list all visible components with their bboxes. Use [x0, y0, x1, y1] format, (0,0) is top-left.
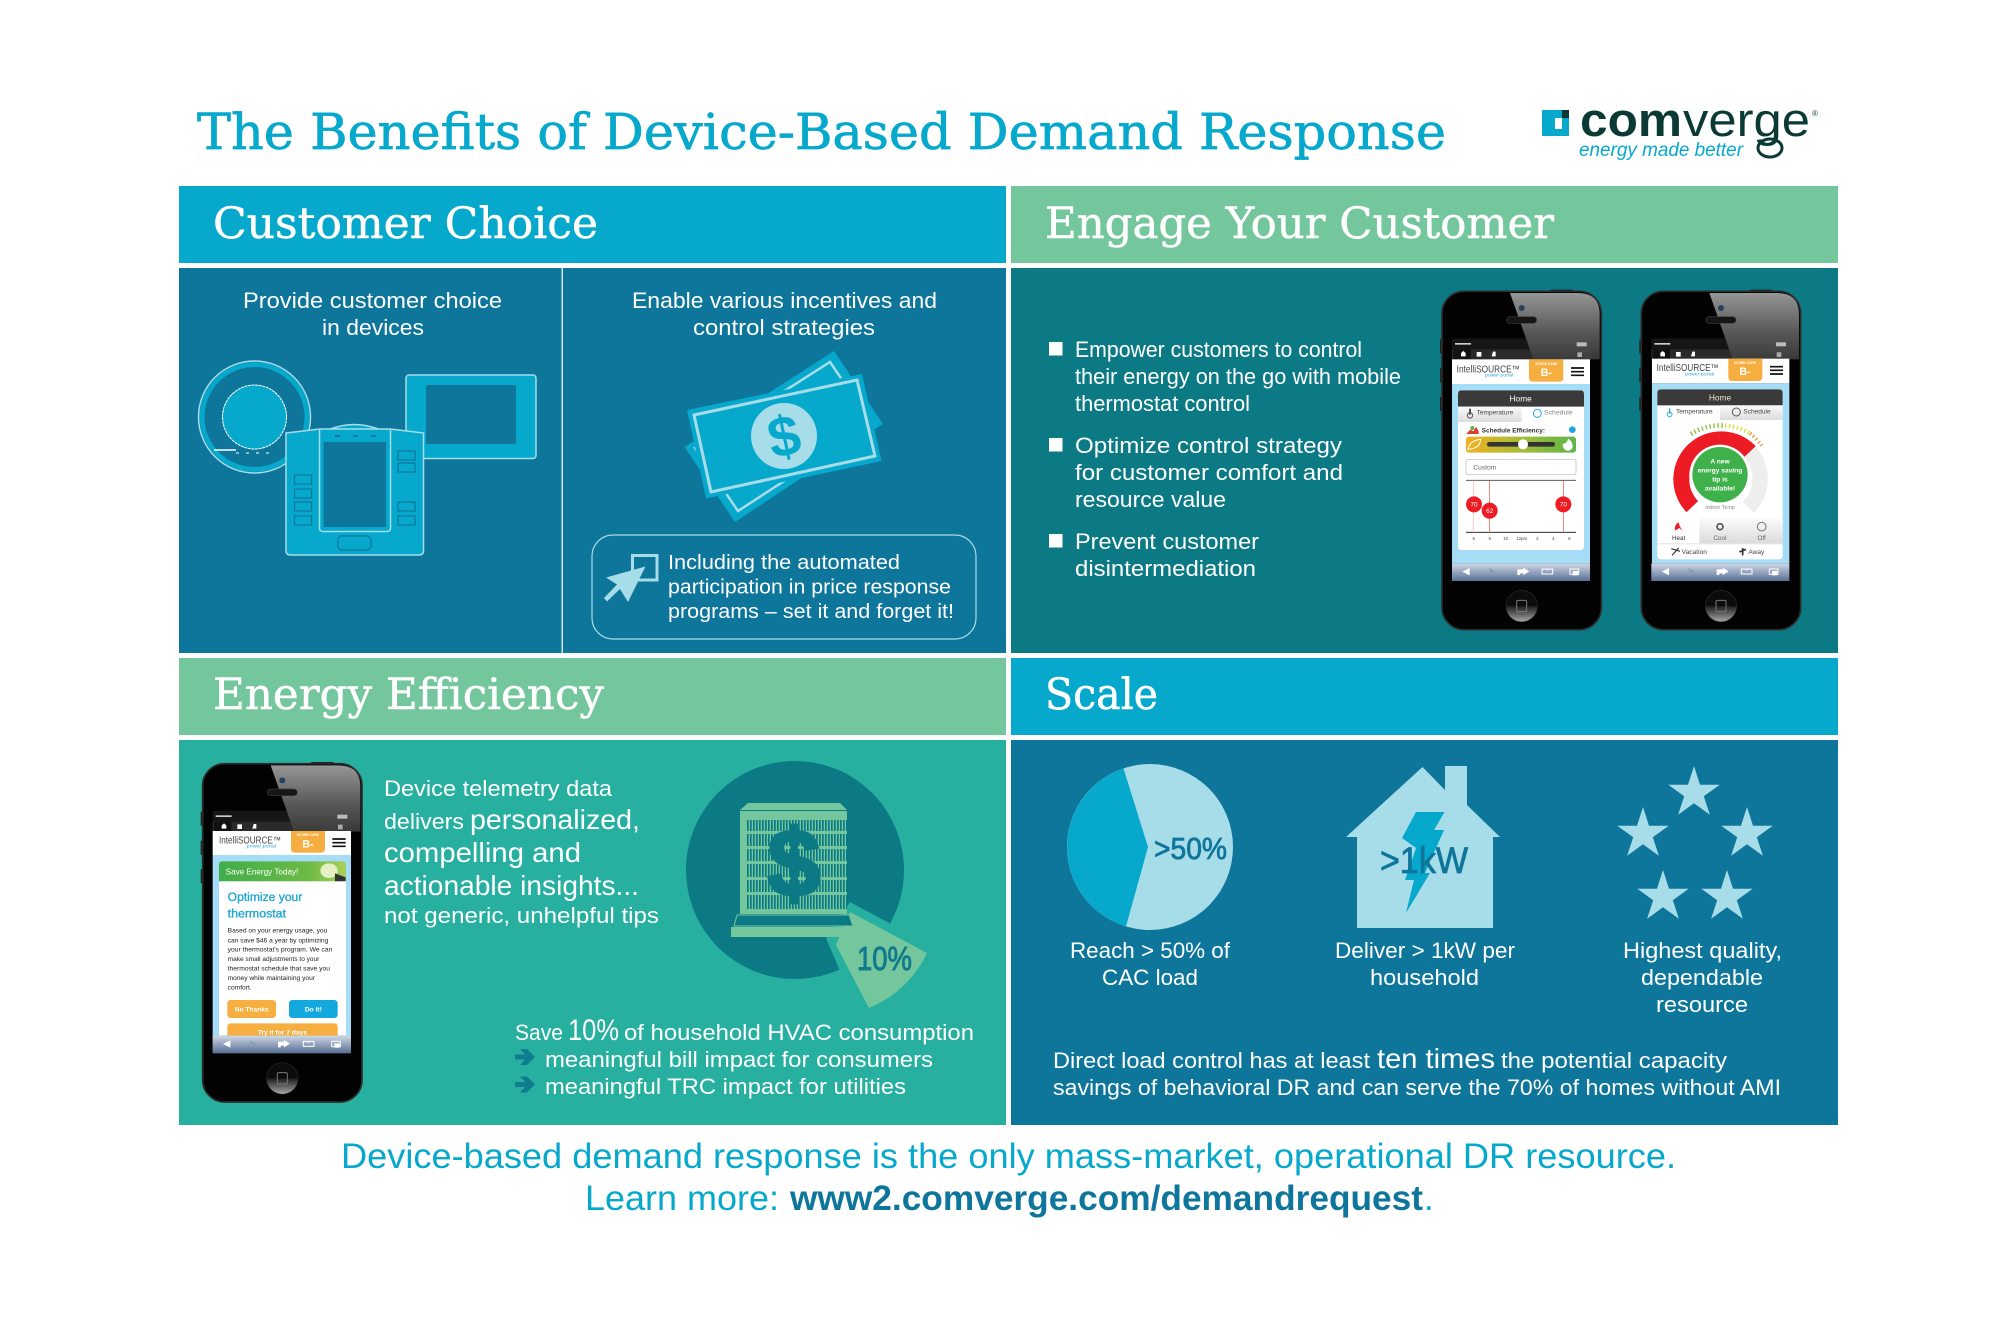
chart: pie >50%	[1067, 764, 1233, 930]
text: save 10% of HVAC consumption: 10%	[568, 1014, 619, 1047]
text: quality: Highest quality,	[1623, 938, 1782, 963]
phone: tip screen: IntelliSOURCE™	[219, 835, 281, 846]
icon: dollar bills: $	[762, 402, 806, 472]
panel: Customer Choice	[179, 186, 1006, 653]
phone: tip screen: make small adjustments to your	[228, 956, 319, 963]
text: customer choice in devices	[243, 288, 502, 340]
panel body	[179, 740, 1006, 1125]
phone: schedule efficiency screen: 6	[1568, 536, 1571, 541]
text: customer choice in devices: Provide customer choice	[243, 288, 502, 313]
arrow 1	[515, 1049, 535, 1065]
icon: round thermostat	[198, 361, 310, 473]
heading: Scale: Scale	[1045, 670, 1158, 720]
text: direct load control	[1053, 1043, 1781, 1100]
heading: Energy Efficiency: Energy Efficiency	[213, 670, 605, 720]
bullet 3	[1049, 529, 1259, 581]
phone: thermostat gauge screen	[1639, 290, 1801, 630]
phone: thermostat gauge screen: Vacation	[1682, 549, 1707, 556]
text: direct load control: the potential capacity	[1501, 1048, 1727, 1073]
footer call to action: .	[1424, 1179, 1434, 1218]
text: direct load control: savings of behavioral DR and can serve the 70% of homes without AMI	[1053, 1075, 1781, 1100]
logo wordmark: com	[1580, 93, 1682, 146]
text: telemetry insights: delivers	[384, 809, 464, 834]
header band: Energy Efficiency	[179, 658, 1006, 735]
text: telemetry insights: compelling and	[384, 837, 581, 868]
phone: schedule efficiency screen: 70	[1560, 502, 1567, 509]
icon: house with lightning bolt: >1kW	[1380, 840, 1468, 881]
text: reach: Reach > 50% of	[1070, 938, 1231, 963]
bullet 1: thermostat control	[1075, 391, 1250, 416]
title: The Benefits of Device-Based Demand Response	[197, 103, 1446, 161]
text: incentives and control strategies: Enable various incentives and	[632, 288, 937, 313]
text: reach: CAC load	[1102, 965, 1198, 990]
phone: schedule efficiency screen: Temperature	[1477, 410, 1514, 417]
text: telemetry insights	[384, 776, 659, 928]
phone: thermostat gauge screen: available!	[1705, 486, 1735, 493]
phone: thermostat gauge screen: IntelliSOURCE™	[1657, 363, 1719, 374]
text: quality: dependable	[1641, 965, 1763, 990]
text: telemetry insights: personalized,	[470, 804, 640, 835]
arrow 2	[515, 1076, 535, 1092]
icon: wall display	[406, 375, 536, 458]
phone: tip screen: SCORE CARD	[297, 833, 320, 837]
phone: tip screen: money while maintaining your	[228, 975, 315, 982]
header band: Engage Your Customer	[1011, 186, 1838, 263]
phone: tip screen: thermostat schedule that save you	[228, 966, 331, 973]
phone: schedule efficiency screen: Home	[1510, 394, 1532, 404]
phone: thermostat gauge screen: Away	[1748, 549, 1765, 556]
phone: thermostat gauge screen: Schedule	[1743, 408, 1771, 415]
phone: schedule efficiency screen: IntelliSOURCE™	[1457, 364, 1520, 375]
text: save 10% of HVAC consumption: meaningful bill impact for consumers	[545, 1047, 933, 1072]
phone: schedule efficiency screen: Schedule Efficiency:	[1482, 427, 1545, 434]
text: incentives and control strategies	[632, 288, 937, 340]
bullet 1: Empower customers to control	[1075, 337, 1362, 362]
icon: logo square	[1542, 110, 1569, 136]
phone: tip screen: can save $46 a year by optimizing	[228, 937, 329, 944]
phone: tip screen: comfort.	[228, 985, 252, 992]
phone: thermostat gauge screen: B-	[1739, 366, 1751, 378]
text: save 10% of HVAC consumption: Save	[515, 1020, 563, 1045]
phone: schedule efficiency screen: 62	[1486, 508, 1494, 515]
text: save 10% of HVAC consumption: of household HVAC consumption	[624, 1020, 974, 1045]
bullet 3: Prevent customer	[1075, 529, 1259, 554]
phone: schedule efficiency screen: Custom	[1473, 464, 1497, 471]
logo: comverge	[1542, 93, 1818, 161]
heading: Customer Choice: Customer Choice	[213, 199, 598, 249]
logo tagline: energy made better	[1579, 140, 1744, 161]
icon: touchscreen thermostat	[286, 424, 424, 555]
phone: schedule efficiency screen: SCORE CARD	[1535, 362, 1558, 366]
panel body	[1011, 740, 1838, 1125]
phone: tip screen: Optimize your	[228, 890, 302, 904]
bullet 2	[1049, 433, 1343, 512]
panel: Energy Efficiency	[179, 658, 1006, 1125]
phone: thermostat gauge screen: A new	[1710, 458, 1730, 465]
bullet 2: resource value	[1075, 487, 1226, 512]
logo: comverge: verge	[1683, 93, 1810, 146]
phone: schedule efficiency screen	[1440, 290, 1601, 630]
phone: tip screen: thermostat	[228, 906, 287, 920]
phone: thermostat gauge screen: Heat	[1672, 535, 1686, 542]
text: save 10% of HVAC consumption	[515, 1014, 974, 1099]
phone: schedule efficiency screen: B-	[1541, 367, 1552, 379]
text: reach	[1070, 938, 1231, 990]
logo: comverge: ®	[1812, 109, 1818, 118]
phone: schedule efficiency screen: power portal	[1485, 373, 1513, 378]
phone: thermostat gauge screen: Home	[1709, 392, 1731, 402]
phone: thermostat gauge screen: SCORE CARD	[1734, 361, 1757, 365]
text: direct load control: Direct load control has at least	[1053, 1048, 1370, 1073]
panel: Engage Your Customer	[1011, 186, 1838, 653]
text: customer choice in devices: in devices	[322, 315, 424, 340]
phone: schedule efficiency screen: 8	[1488, 536, 1491, 541]
callout text: programs – set it and forget it!	[668, 600, 954, 623]
chart: 10% pie with HVAC unit	[686, 761, 927, 1008]
bullet 2: for customer comfort and	[1075, 460, 1343, 485]
phone: schedule efficiency screen: 2	[1536, 536, 1539, 541]
text: save 10% of HVAC consumption: meaningful TRC impact for utilities	[545, 1074, 906, 1099]
bullet list	[1049, 337, 1401, 581]
panel body	[179, 268, 1006, 653]
callout text: participation in price response	[668, 576, 951, 598]
phone: tip screen: No Thanks	[235, 1007, 269, 1014]
text: telemetry insights: Device telemetry data	[384, 776, 613, 801]
text: quality	[1623, 938, 1782, 1017]
phone: tip screen: B-	[302, 838, 314, 850]
callout text: Including the automated	[668, 551, 900, 574]
phone: tip screen: Do It!	[305, 1007, 322, 1014]
bullet 1: their energy on the go with mobile	[1075, 364, 1401, 389]
heading: Engage Your Customer: Engage Your Customer	[1045, 199, 1554, 249]
text: incentives and control strategies: control strategies	[693, 315, 875, 340]
panel body	[1011, 268, 1838, 653]
phone: tip screen: power portal	[247, 844, 276, 849]
text: direct load control: ten times	[1377, 1043, 1495, 1074]
text: telemetry insights: not generic, unhelpful tips	[384, 903, 659, 928]
chart: pie >50%: >50%	[1154, 831, 1227, 866]
phone: thermostat gauge screen: power portal	[1685, 372, 1714, 377]
footer call to action: Learn more:	[585, 1179, 779, 1218]
phone: schedule efficiency screen: 4	[1552, 536, 1555, 541]
header band: Customer Choice	[179, 186, 1006, 263]
phone: thermostat gauge screen: energy saving	[1698, 468, 1742, 475]
phone: schedule efficiency screen: 12pm	[1516, 536, 1527, 541]
phone: schedule efficiency screen: 70	[1470, 502, 1478, 509]
phone: thermostat gauge screen: Temperature	[1676, 408, 1713, 415]
text: telemetry insights: actionable insights...	[384, 870, 639, 901]
phone: tip screen: Try it for 7 days	[258, 1029, 307, 1036]
text: deliver	[1335, 938, 1515, 990]
phone: thermostat gauge screen: Off	[1757, 535, 1766, 542]
phone: schedule efficiency screen: 6	[1472, 536, 1475, 541]
icon: HVAC unit: $	[767, 810, 821, 917]
bullet 3: disintermediation	[1075, 556, 1256, 581]
footer call to action	[341, 1137, 1676, 1218]
phone: thermostat gauge screen: Cool	[1713, 535, 1727, 542]
text: deliver: Deliver > 1kW per	[1335, 938, 1515, 963]
callout: automated participation	[592, 535, 976, 639]
phone: tip screen: Save Energy Today!	[226, 867, 298, 877]
icon: cursor click	[604, 556, 657, 602]
footer call to action: Device-based demand response is the only mass-market, operational DR resource.	[341, 1137, 1676, 1176]
phone: tip screen	[201, 762, 362, 1102]
icon: dollar bills	[684, 351, 883, 522]
phone: tip screen: Based on your energy usage, you	[228, 928, 328, 935]
icon: five stars	[1617, 766, 1773, 919]
text: quality: resource	[1656, 992, 1748, 1017]
phone: thermostat gauge screen: tip is	[1712, 477, 1728, 484]
phone: schedule efficiency screen: 10	[1503, 536, 1509, 541]
icon: house with lightning bolt	[1346, 766, 1500, 928]
bullet 1	[1049, 337, 1401, 416]
footer call to action: www2.comverge.com/demandrequest	[789, 1179, 1423, 1218]
phone: tip screen: your thermostat's program. We can	[228, 947, 333, 954]
bullet 2: Optimize control strategy	[1075, 433, 1342, 458]
phone: thermostat gauge screen: Indoor Temp	[1705, 505, 1735, 511]
label: 10%: 10%	[857, 940, 912, 977]
text: deliver: household	[1370, 965, 1479, 990]
panel: Scale	[1011, 658, 1838, 1125]
icon: HVAC unit	[731, 803, 858, 937]
phone: schedule efficiency screen: Schedule	[1544, 410, 1573, 417]
header band: Scale	[1011, 658, 1838, 735]
